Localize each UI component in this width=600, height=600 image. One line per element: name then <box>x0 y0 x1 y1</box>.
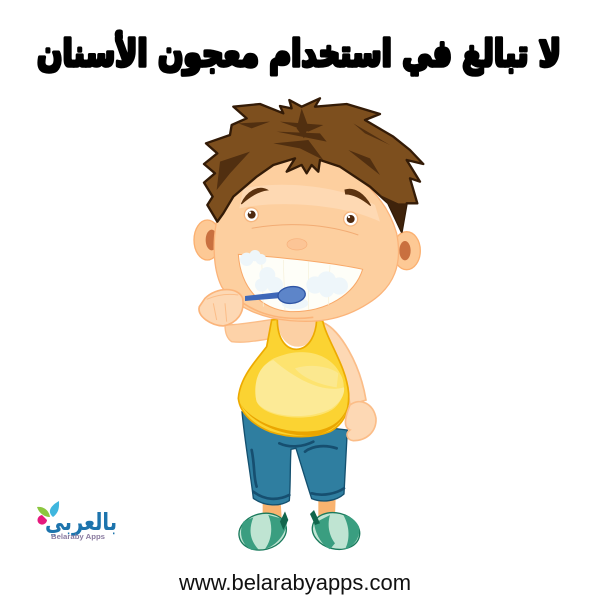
lowered arm <box>322 323 366 405</box>
website url: www.belarabyapps.com <box>178 570 411 595</box>
logo droplet blue <box>50 501 59 517</box>
tank top belly <box>255 360 344 416</box>
eyebrow right <box>345 189 371 206</box>
hair <box>204 98 423 232</box>
hem shading <box>240 403 347 436</box>
hair shading <box>217 108 390 190</box>
logo <box>37 501 117 541</box>
toothbrush <box>245 285 306 305</box>
forehead shade <box>239 185 380 222</box>
fist finger lines <box>207 294 238 322</box>
eye right <box>344 212 358 226</box>
logo droplet green <box>37 507 50 517</box>
logo wordmark: بالعربي <box>45 508 117 536</box>
brow crease <box>252 225 358 235</box>
illustration: boy body <box>225 310 376 555</box>
legs above slippers <box>263 498 336 523</box>
logo subtitle: Belaraby Apps <box>51 534 105 541</box>
hair bottom edge <box>377 193 407 232</box>
neck <box>277 310 317 347</box>
raised arm <box>225 319 273 342</box>
right ear <box>393 232 420 270</box>
toothpaste foam <box>240 250 348 309</box>
raised fist <box>199 290 243 326</box>
slipper right <box>308 508 364 554</box>
trouser folds <box>252 442 344 499</box>
face <box>214 156 399 321</box>
illustration: boy head <box>194 98 423 326</box>
eye left <box>244 208 258 222</box>
nose <box>287 239 307 250</box>
lowered hand <box>345 402 376 441</box>
mouth and teeth <box>238 254 363 312</box>
logo droplet pink <box>38 515 47 525</box>
trousers <box>242 412 347 505</box>
eyebrow left <box>241 188 267 204</box>
left ear <box>194 220 221 260</box>
chin line <box>243 303 313 318</box>
slipper left <box>235 508 290 555</box>
tank top <box>238 319 349 437</box>
tank top highlight <box>256 352 344 418</box>
